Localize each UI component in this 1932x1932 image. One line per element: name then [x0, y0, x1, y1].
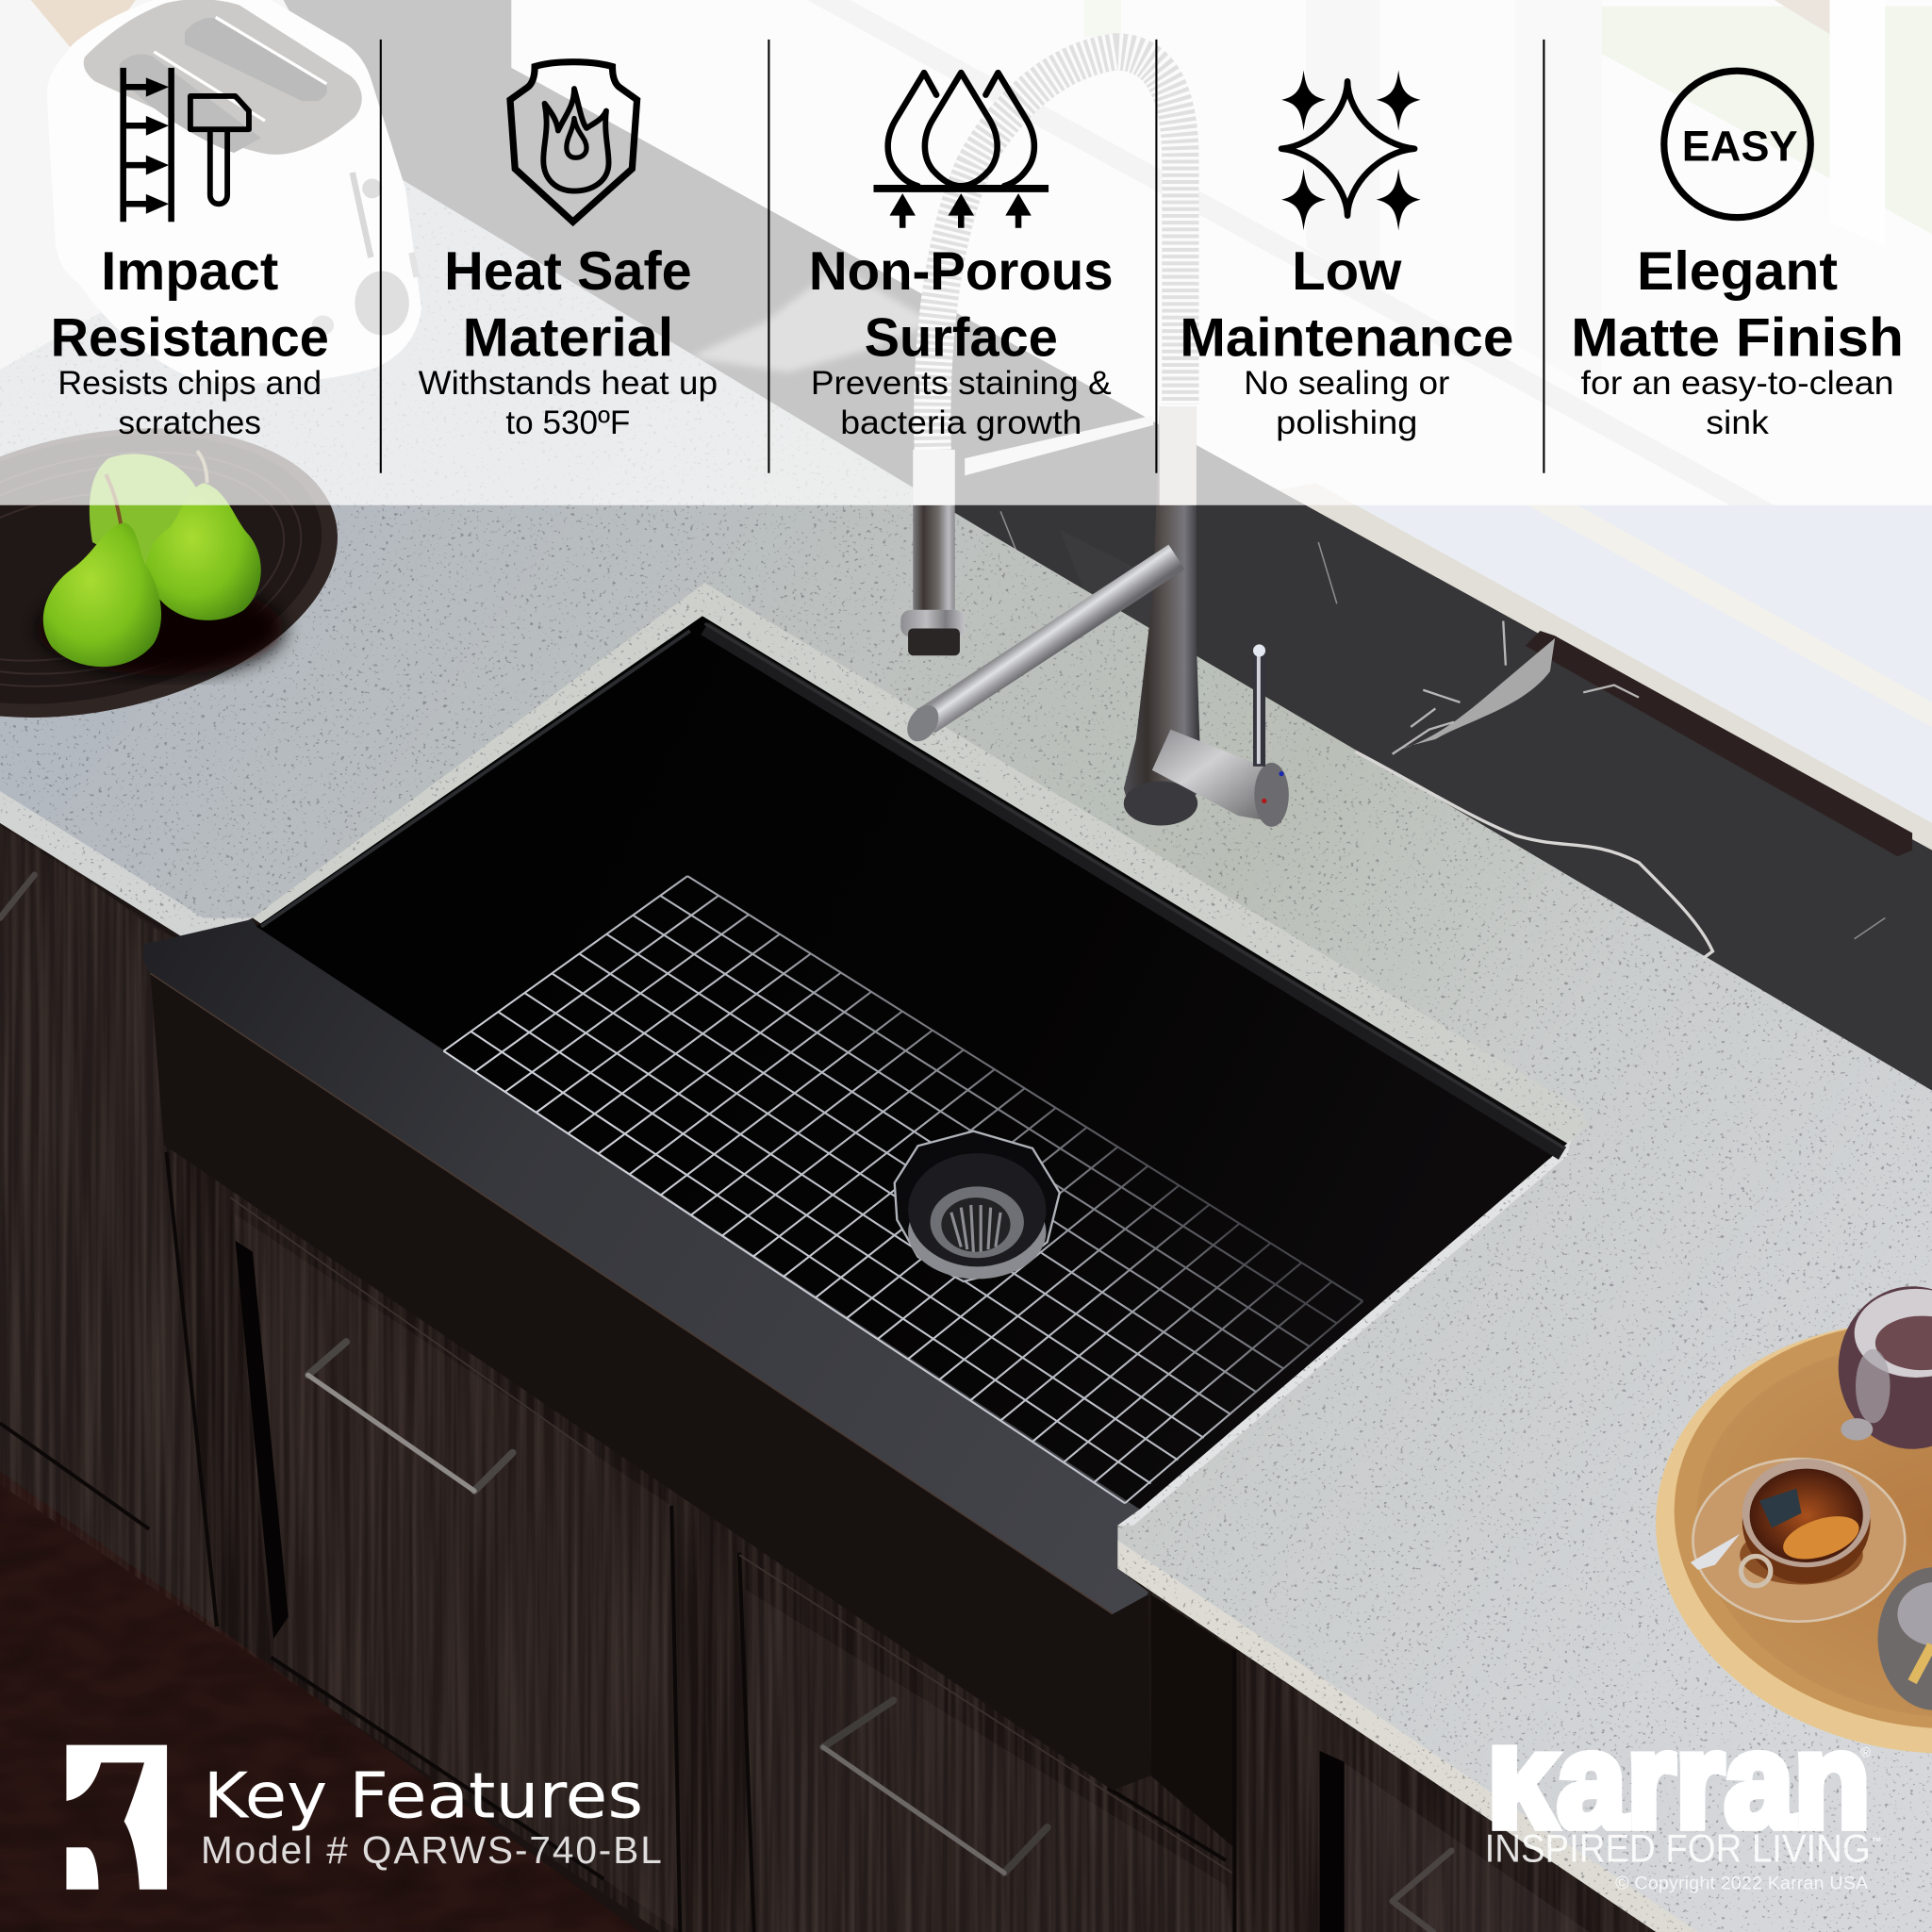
feature: impact resistance: [51, 68, 329, 441]
translucent white top band: [0, 0, 1932, 505]
icon: easy badge: [1664, 71, 1810, 218]
glass jar: [1878, 1567, 1932, 1710]
window and wall: [511, 0, 1932, 850]
faucet with pull-down spring: [900, 52, 1289, 827]
title: Key Features: Key Features: [204, 1759, 643, 1832]
feature: heat safe: [419, 62, 718, 441]
heading: Non-Porous Surface: [809, 241, 1114, 369]
heading: Heat Safe Material: Heat Safe: [444, 241, 692, 302]
logo: karran wordmark: INSPIRED FOR LIVING: [1485, 1826, 1871, 1871]
heading: Impact Resistance: [51, 241, 329, 369]
heading: Elegant Matte Finish: Matte Finish: [1571, 308, 1904, 369]
bottom marble vein: [1355, 751, 1712, 959]
text: resists chips: [58, 365, 322, 441]
floor: [0, 1471, 641, 1932]
feature: low maintenance: [1180, 70, 1513, 441]
text: resists chips: scratches: [118, 405, 261, 441]
drain strainer: [895, 1131, 1060, 1281]
feature: non-porous: [809, 73, 1114, 441]
text: easy to clean: for an easy-to-clean: [1581, 365, 1893, 402]
toaster: [31, 0, 421, 383]
text: no sealing: No sealing or: [1244, 365, 1450, 402]
icon: flame shield: [510, 62, 637, 222]
text: no sealing: [1244, 365, 1450, 441]
heading: Low Maintenance: Maintenance: [1180, 308, 1513, 369]
logo: karran wordmark: [1488, 1744, 1880, 1893]
heading: Non-Porous Surface: Non-Porous: [809, 241, 1114, 302]
pears: [43, 451, 261, 667]
heading: Low Maintenance: [1180, 241, 1513, 369]
heading: Elegant Matte Finish: [1571, 241, 1904, 369]
icon: easy badge: EASY: [1682, 123, 1798, 171]
sink basin: [256, 616, 1567, 1510]
logo: karran wordmark: ™: [1872, 1837, 1881, 1847]
text: easy to clean: sink: [1706, 405, 1769, 441]
heading: Impact Resistance: Resistance: [51, 308, 329, 369]
heading: Impact Resistance: Impact: [101, 241, 278, 302]
logo: karran wordmark: karran: [1487, 1705, 1871, 1858]
text: prevents staining: [811, 365, 1112, 441]
icon: water drops over surface: [873, 73, 1049, 228]
plate: [0, 387, 365, 760]
icon: wall and hammer: [124, 68, 249, 222]
cabinet handles: [0, 875, 1451, 1932]
heading: Heat Safe Material: [444, 241, 692, 369]
tea cup and saucer: [1691, 1459, 1905, 1622]
panel: five feature columns: [51, 40, 1904, 473]
text: resists chips: Resists chips and: [58, 365, 322, 402]
wire grid: [443, 876, 1362, 1503]
marble backsplash: [284, 0, 1932, 1090]
logo: karran wordmark: ®: [1860, 1745, 1871, 1760]
icon: sparkles: [1281, 70, 1421, 230]
text: no sealing: polishing: [1276, 405, 1417, 441]
logo: karran wordmark: © Copyright 2022 Karran USA: [1615, 1873, 1869, 1893]
subtitle: model number: Model # QARWS-740-BL: [201, 1828, 662, 1872]
heading: Low Maintenance: Low: [1292, 241, 1402, 302]
text: withstands heat: [419, 365, 718, 441]
sink apron: [143, 919, 1151, 1791]
text: prevents staining: bacteria growth: [840, 405, 1082, 441]
heading: Elegant Matte Finish: Elegant: [1637, 241, 1838, 302]
text: withstands heat: to 530ºF: [505, 405, 630, 441]
cabinets: [0, 813, 1656, 1932]
feature: elegant matte finish: [1571, 71, 1904, 441]
text: withstands heat: Withstands heat up: [419, 365, 718, 402]
text: easy to clean: [1581, 365, 1893, 441]
text: prevents staining: Prevents staining &: [811, 365, 1112, 402]
window sill: [1277, 469, 1932, 852]
teapot: [1839, 1286, 1932, 1449]
logo: Karran R mark: [66, 1745, 167, 1890]
wooden tray: [1627, 1286, 1932, 1788]
heading: Non-Porous Surface: Surface: [865, 308, 1058, 369]
heading: Heat Safe Material: Material: [463, 308, 673, 369]
